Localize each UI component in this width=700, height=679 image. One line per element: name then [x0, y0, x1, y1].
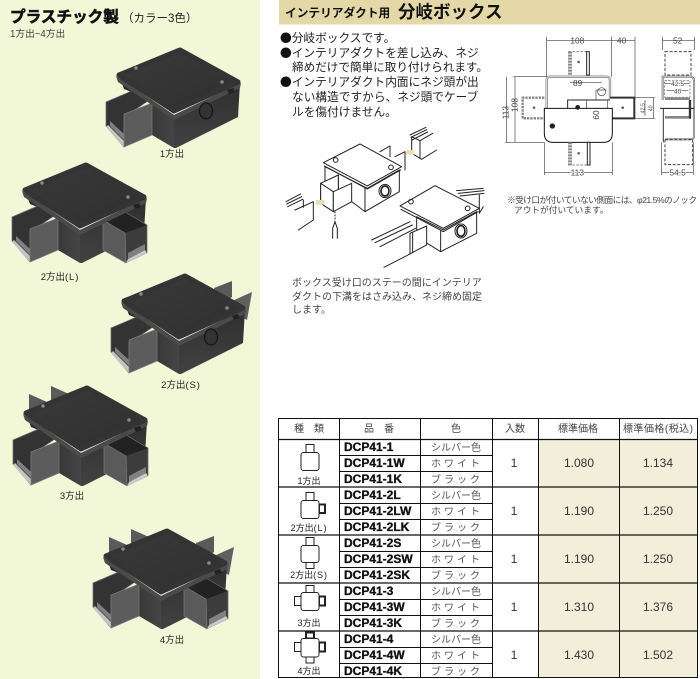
- title band: 分岐ボックス: [398, 2, 502, 22]
- product photo: 2 outlets S: [111, 276, 252, 374]
- row: 4 outlets: 4方出: [297, 665, 321, 676]
- row: 2 outlets L: [291, 488, 673, 534]
- row: 2 outlets S: 1.250: [643, 552, 673, 566]
- caption: 4 outlets: 4方出: [160, 634, 184, 646]
- plan view: 40: [617, 36, 627, 46]
- feature list: ●インテリアダクト内面にネジ頭が出: [280, 73, 479, 90]
- row: 1 outlet: 1.080: [564, 456, 594, 470]
- row: 3 outlets: DCP41-3: [344, 584, 394, 598]
- plan view: 42.5: [641, 103, 647, 114]
- caption: 3 outlets: 3方出: [60, 490, 84, 502]
- row: 2 outlets L: 1: [511, 504, 518, 518]
- caption: 2 outlets S: 2方出(S): [161, 379, 201, 391]
- row: 4 outlets: ホワイト: [431, 650, 480, 662]
- feature list: 締めだけで簡単に取り付けられます。: [292, 60, 488, 74]
- table header: 種 類: [294, 422, 324, 435]
- row: 2 outlets L: DCP41-2L: [344, 488, 401, 502]
- left panel background: [0, 0, 260, 679]
- upper box with duct: [286, 127, 437, 238]
- installation caption: ダクトの下溝をはさみ込み、ネジ締め固定: [292, 290, 482, 303]
- installation caption: ボックス受け口のステーの間にインテリア: [292, 277, 482, 289]
- row: 1 outlet: 1: [511, 456, 518, 470]
- row: 1 outlet: 1.134: [643, 456, 673, 470]
- table header: 標準価格(税込): [623, 422, 693, 435]
- heading: plastic: （カラー3色）: [122, 12, 197, 25]
- side view: [660, 36, 694, 177]
- row: 2 outlets L: ブラック: [431, 521, 480, 534]
- table header: 標準価格: [558, 422, 598, 435]
- row: 4 outlets: シルバー色: [431, 634, 481, 646]
- feature list: [280, 29, 488, 119]
- row: 3 outlets: シルバー色: [431, 586, 481, 598]
- feature list: ●分岐ボックスです。: [280, 29, 395, 46]
- row: 1 outlet: ホワイト: [431, 458, 480, 470]
- row: 4 outlets: 1.430: [564, 648, 594, 662]
- table header: 色: [451, 423, 461, 435]
- icon: 4 outlets: [294, 632, 325, 663]
- knockout note: アウトが付いています。: [514, 204, 608, 215]
- row: 2 outlets L: シルバー色: [431, 490, 481, 502]
- icon: 3 outlets: [294, 586, 325, 610]
- icon: 1 outlet: [301, 444, 319, 470]
- plan view: 108: [570, 36, 585, 46]
- row: 2 outlets L: 2方出(L): [291, 522, 327, 533]
- icon: 2 outlets S: [301, 538, 319, 568]
- side view: 40: [674, 88, 682, 95]
- row: 2 outlets S: 1: [511, 552, 518, 566]
- row: 2 outlets L: DCP41-2LK: [344, 520, 410, 534]
- row: 2 outlets S: [290, 536, 673, 582]
- row: 3 outlets: 3方出: [297, 617, 321, 628]
- product photo: 3 outlets: [13, 386, 148, 486]
- side view: 52: [673, 36, 683, 46]
- row: 4 outlets: 1.502: [643, 648, 673, 662]
- row: 4 outlets: [294, 632, 673, 678]
- row: 2 outlets S: DCP41-2S: [344, 536, 401, 550]
- plan view: 108: [509, 98, 519, 112]
- row: 3 outlets: [294, 584, 673, 630]
- row: 2 outlets L: DCP41-2LW: [344, 504, 412, 518]
- plan view: 113: [571, 167, 584, 177]
- caption: 2 outlets L: 2方出(L): [41, 271, 79, 283]
- row: 2 outlets S: シルバー色: [431, 538, 481, 550]
- product photo: 1 outlet: [106, 50, 241, 148]
- feature list: ●インテリアダクトを差し込み、ネジ: [280, 44, 479, 61]
- row: 3 outlets: ブラック: [431, 617, 480, 630]
- heading: plastic: [10, 8, 197, 26]
- plan view: 40: [649, 105, 655, 111]
- heading: plastic: プラスチック製: [10, 8, 119, 26]
- caption: 1 outlet: 1方出: [160, 148, 184, 160]
- row: 4 outlets: ブラック: [431, 665, 480, 678]
- lower box assembled: [372, 186, 484, 267]
- title band: [279, 0, 700, 24]
- knockout note: [507, 194, 697, 215]
- row: 1 outlet: DCP41-1K: [344, 472, 402, 486]
- row: 1 outlet: DCP41-1: [344, 440, 394, 454]
- table header: 入数: [505, 422, 525, 435]
- product table: [278, 418, 698, 678]
- row: 1 outlet: 1方出: [297, 475, 321, 486]
- row: 3 outlets: DCP41-3W: [344, 600, 405, 614]
- row: 2 outlets L: 1.250: [643, 504, 673, 518]
- plan view: 60: [591, 110, 601, 120]
- row: 2 outlets S: ブラック: [431, 569, 480, 582]
- plan view: 89: [573, 78, 583, 88]
- row: 3 outlets: 1: [511, 600, 518, 614]
- row: 2 outlets S: 2方出(S): [290, 569, 328, 580]
- installation caption: [292, 277, 482, 316]
- row: 2 outlets S: ホワイト: [431, 554, 480, 566]
- installation illustration: [286, 127, 484, 267]
- row: 2 outlets L: ホワイト: [431, 506, 480, 518]
- installation caption: します。: [292, 304, 331, 316]
- row: 3 outlets: DCP41-3K: [344, 616, 402, 630]
- row: 4 outlets: 1: [511, 648, 518, 662]
- row: 2 outlets S: DCP41-2SK: [344, 568, 410, 582]
- price cell shading: [538, 439, 698, 678]
- row: 1 outlet: DCP41-1W: [344, 456, 405, 470]
- icon: 2 outlets L: [301, 492, 325, 518]
- table header: [294, 422, 693, 435]
- side view: 42.5: [671, 81, 684, 88]
- title band: インテリアダクト用: [285, 6, 390, 20]
- row: 2 outlets L: 1.190: [564, 504, 594, 518]
- row: 4 outlets: DCP41-4: [344, 632, 394, 646]
- feature list: ない構造ですから、ネジ頭でケーブ: [292, 90, 479, 104]
- row: 2 outlets S: DCP41-2SW: [344, 552, 413, 566]
- subheading: outlet range: 1方出~4方出: [10, 27, 65, 40]
- knockout note: ※受け口が付いていない側面には、φ21.5%のノック: [507, 194, 697, 205]
- row: 4 outlets: DCP41-4W: [344, 648, 405, 662]
- row: 1 outlet: シルバー色: [431, 442, 481, 454]
- row: 2 outlets S: 1.190: [564, 552, 594, 566]
- row: 3 outlets: ホワイト: [431, 602, 480, 614]
- side view: 54.5: [670, 167, 686, 177]
- table grid: [278, 418, 698, 678]
- plan view: 113: [501, 106, 511, 119]
- product photo: 4 outlets: [93, 529, 234, 629]
- row: 4 outlets: DCP41-4K: [344, 664, 402, 678]
- row: 3 outlets: 1.376: [643, 600, 673, 614]
- row: 1 outlet: ブラック: [431, 473, 480, 486]
- row: 3 outlets: 1.310: [564, 600, 594, 614]
- dimension drawing: [501, 36, 694, 177]
- row: 1 outlet: [297, 440, 673, 486]
- plan view: [501, 36, 655, 177]
- feature list: ルを傷付けません。: [292, 105, 397, 119]
- product photo: 2 outlets L: [12, 165, 147, 263]
- table header: 品 番: [364, 423, 394, 435]
